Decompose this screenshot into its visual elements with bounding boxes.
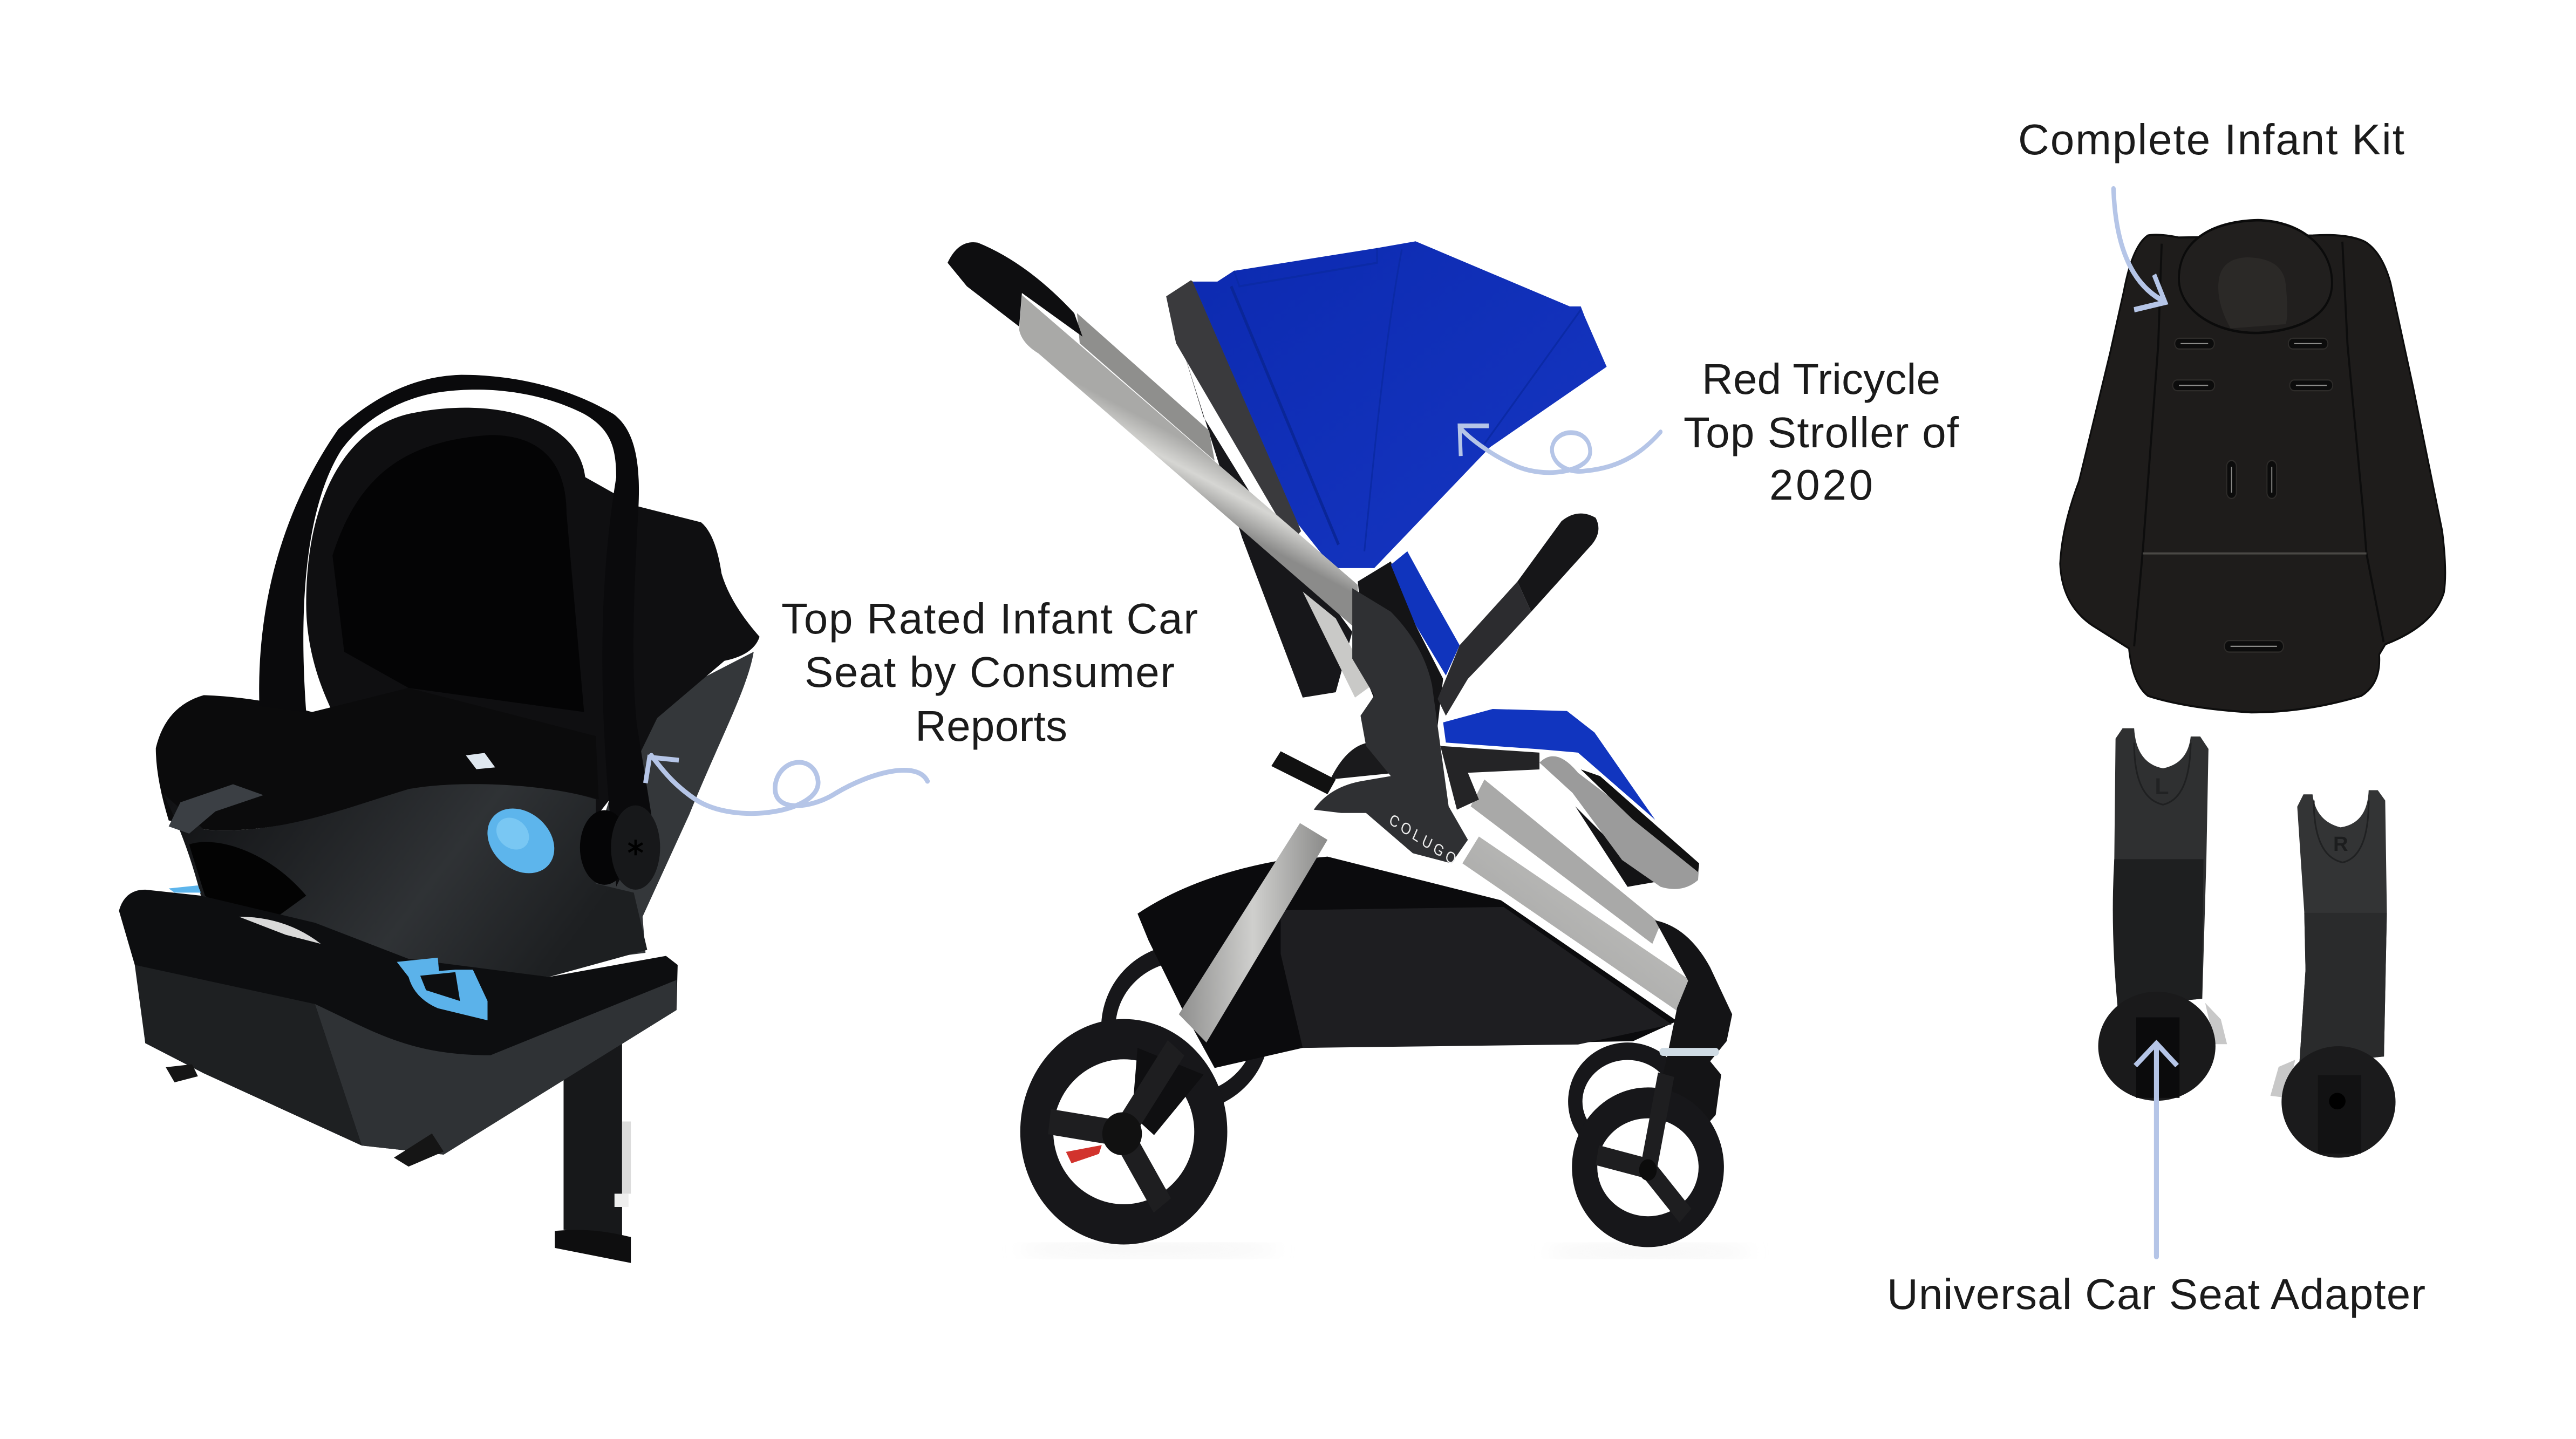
text: stroller label: Top Stroller of xyxy=(1684,408,1959,456)
handle hub shadow xyxy=(580,810,629,885)
footrest support xyxy=(1440,746,1539,810)
blue belt hook xyxy=(397,958,488,1020)
blue seat cushion xyxy=(1443,709,1655,820)
right adapter: R xyxy=(2333,833,2348,856)
text: stroller label: 2020 xyxy=(1769,461,1873,509)
swivel ring xyxy=(1659,1048,1719,1056)
handlebar grip xyxy=(948,242,1082,337)
handlebar tube lower xyxy=(1303,591,1372,698)
far wheels xyxy=(1108,952,1680,1152)
harness slots xyxy=(2173,338,2333,652)
arrow: infant kit callout xyxy=(2114,189,2165,310)
handle pivot xyxy=(611,806,660,890)
text: car seat label xyxy=(781,595,1198,750)
car seat lower shell xyxy=(163,784,648,977)
panel: infant car seat xyxy=(119,375,928,1263)
front fork xyxy=(1639,920,1732,1182)
left adapter xyxy=(2098,728,2227,1101)
seat frame behind joint xyxy=(1358,561,1443,753)
shopping basket xyxy=(1137,857,1677,1068)
car seat rear shell xyxy=(584,652,754,959)
text: car seat label: Top Rated Infant Car xyxy=(781,595,1198,643)
blue seat back xyxy=(1391,551,1460,676)
arrow: car seat callout xyxy=(645,755,928,814)
car seat cushion xyxy=(156,688,599,830)
carry handle xyxy=(259,375,651,886)
brand label: COLUGO xyxy=(1387,810,1462,870)
front leg tube xyxy=(1462,836,1691,1011)
text: adapter label: Universal Car Seat Adapter xyxy=(1887,1270,2425,1318)
right adapter xyxy=(2271,790,2396,1158)
text: stroller label: Red Tricycle xyxy=(1702,355,1940,403)
panel: stroller xyxy=(948,241,1754,1258)
strap tab xyxy=(1271,751,1336,794)
seat frame edge xyxy=(1166,280,1301,541)
insert fold line xyxy=(2143,552,2367,555)
release button xyxy=(475,795,567,886)
slot highlights xyxy=(2179,344,2327,646)
text: infant kit label: Complete Infant Kit xyxy=(2018,115,2404,163)
text: car seat label: Reports xyxy=(915,702,1067,750)
shoulder strap xyxy=(169,785,263,834)
rack tube xyxy=(1471,780,1661,944)
footrest xyxy=(1539,756,1699,889)
shell cutout xyxy=(189,842,306,932)
pivot star xyxy=(629,840,643,855)
wheel arch behind joint xyxy=(1330,742,1396,780)
blue canopy xyxy=(1192,241,1607,568)
panel: car seat adapters xyxy=(2098,728,2396,1257)
panel: infant insert xyxy=(2060,189,2445,712)
center joint xyxy=(1314,588,1468,863)
front wheel xyxy=(1585,1075,1711,1232)
arrow: stroller callout xyxy=(1460,426,1661,473)
car seat base xyxy=(119,885,678,1167)
front arm bar xyxy=(1437,514,1598,715)
head support xyxy=(2179,220,2332,333)
load leg xyxy=(555,1037,631,1263)
rear leg tube xyxy=(1179,823,1327,1042)
handlebar main tube xyxy=(1019,295,1358,631)
seat back fabric xyxy=(1179,337,1352,698)
left adapter: L xyxy=(2155,774,2169,800)
text: car seat label: Seat by Consumer xyxy=(805,648,1175,696)
car seat canopy xyxy=(306,408,760,833)
arrow: adapter callout xyxy=(2135,1044,2177,1257)
fabric tag xyxy=(466,753,495,769)
ground shadows xyxy=(1017,1244,1754,1258)
insert center panel seams xyxy=(2134,242,2384,646)
insert pad xyxy=(2060,235,2445,712)
rear wheel xyxy=(1037,1039,1211,1224)
text: stroller label xyxy=(1684,355,1959,509)
car seat interior xyxy=(332,435,584,712)
upper handle tube xyxy=(1077,313,1215,461)
